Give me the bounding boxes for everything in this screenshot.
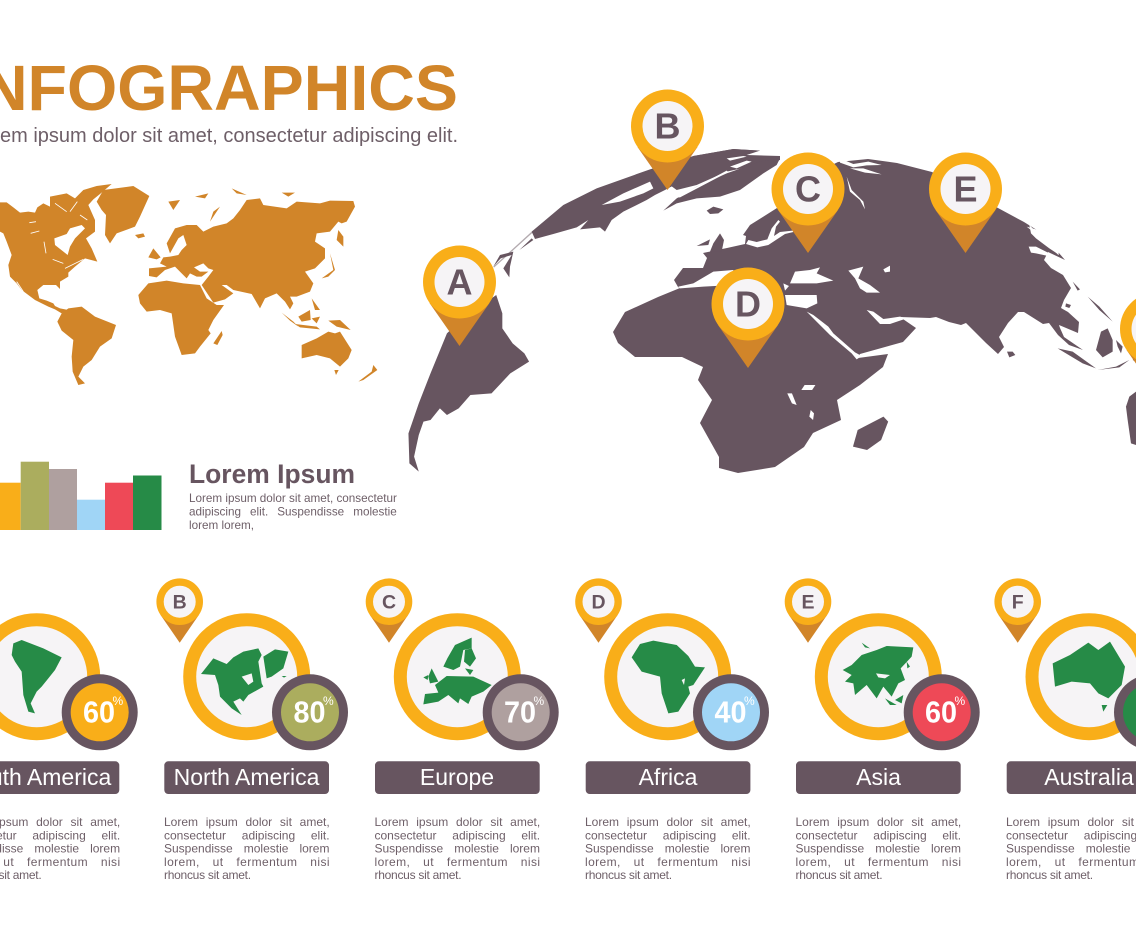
pin A: A xyxy=(446,262,472,302)
text xyxy=(1006,815,1136,882)
pin D: D xyxy=(735,284,761,324)
percent badge: % xyxy=(534,694,544,708)
percent badge: 70 xyxy=(504,694,536,730)
text: consectetur adipiscing elit. xyxy=(585,828,751,842)
text xyxy=(374,815,540,882)
iceland xyxy=(707,207,723,214)
panel: north america xyxy=(156,578,348,882)
text: Lorem ipsum dolor sit amet, xyxy=(796,815,961,829)
small pin xyxy=(994,578,1041,643)
label: Europe xyxy=(420,764,494,790)
text: lorem, ut fermentum nisi xyxy=(374,855,540,869)
percent badge xyxy=(904,674,980,750)
text: Suspendisse molestie lorem xyxy=(585,842,750,856)
african lakes xyxy=(801,385,815,390)
label: Africa xyxy=(639,764,698,790)
large dark world map xyxy=(408,149,1136,473)
arctic streaks xyxy=(850,168,882,174)
ring xyxy=(815,613,942,740)
text: Suspendisse molestie lorem xyxy=(796,842,961,856)
panel: europe xyxy=(366,578,559,882)
pin D xyxy=(712,268,784,368)
panel: australia xyxy=(994,578,1136,882)
south america xyxy=(408,295,529,472)
small pin: D xyxy=(591,592,606,614)
chart text: Lorem ipsum dolor sit amet, consectetur xyxy=(189,492,397,505)
eurasia and africa xyxy=(613,159,1083,473)
label: Australia xyxy=(1044,764,1134,790)
icon: africa map xyxy=(632,641,705,713)
chart text xyxy=(189,492,397,532)
text: consectetur adipiscing elit. xyxy=(164,828,330,842)
label: North America xyxy=(174,764,320,790)
small pin xyxy=(156,578,203,643)
ring xyxy=(604,613,731,740)
panel: asia xyxy=(785,578,980,882)
chart text: lorem lorem, xyxy=(189,519,254,532)
chart text: adipiscing elit. Suspendisse molestie xyxy=(189,506,397,518)
ring xyxy=(0,613,100,740)
small pin xyxy=(366,578,412,643)
madagascar xyxy=(853,417,888,450)
bar chart xyxy=(0,462,162,530)
label xyxy=(375,761,540,794)
label xyxy=(796,761,961,794)
text: Lorem ipsum dolor sit amet, xyxy=(164,815,330,829)
pin C xyxy=(772,152,844,253)
percent badge xyxy=(693,674,769,750)
text: lorem, ut fermentum nisi xyxy=(796,855,961,869)
pin E: E xyxy=(953,168,978,210)
ring xyxy=(183,613,310,740)
icon: south america map xyxy=(12,640,62,713)
pin B xyxy=(631,90,704,190)
text: rhoncus sit amet. xyxy=(585,868,672,882)
small pin: E xyxy=(801,592,815,614)
chart heading: Lorem Ipsum xyxy=(189,459,355,489)
percent badge xyxy=(62,674,138,750)
icon: asia map xyxy=(843,643,913,705)
text: Suspendisse molestie lorem xyxy=(374,842,540,856)
small pin xyxy=(575,578,622,643)
label xyxy=(586,761,750,794)
british isles xyxy=(710,233,724,252)
text xyxy=(585,815,751,882)
text: Lorem ipsum dolor sit amet, xyxy=(585,815,751,829)
text: lorem, ut fermentum nisi xyxy=(164,855,330,869)
greenland xyxy=(667,149,780,190)
small orange world map xyxy=(0,184,377,385)
small pin: B xyxy=(173,592,187,614)
label: Asia xyxy=(856,764,901,790)
text: Suspendisse molestie lorem xyxy=(164,842,329,856)
percent badge: % xyxy=(954,694,966,708)
percent badge: % xyxy=(112,694,124,708)
small pin xyxy=(785,578,831,643)
small pin: C xyxy=(382,592,396,614)
percent badge xyxy=(1114,674,1136,750)
seas xyxy=(678,270,733,288)
text: rhoncus sit amet. xyxy=(1006,868,1093,882)
pin A xyxy=(423,246,496,346)
pin F xyxy=(1120,292,1136,393)
pin C: C xyxy=(795,168,821,210)
text: consectetur adipiscing elit. xyxy=(796,828,961,842)
icon: europe map xyxy=(423,638,492,704)
text: lorem, ut fermentum nisi xyxy=(585,855,751,869)
text xyxy=(796,815,961,882)
text: rhoncus sit amet. xyxy=(164,868,251,882)
asia east islands xyxy=(1029,225,1059,255)
north america xyxy=(532,149,760,239)
label xyxy=(1007,761,1136,794)
text: rhoncus sit amet. xyxy=(374,868,461,882)
percent badge: 60 xyxy=(83,694,115,730)
panel: africa xyxy=(575,578,769,882)
pin B: B xyxy=(654,106,680,146)
text xyxy=(164,815,330,882)
ring xyxy=(394,613,521,740)
panel: south america xyxy=(0,613,138,882)
percent badge xyxy=(483,674,559,750)
percent badge: % xyxy=(323,694,334,708)
text: Lorem ipsum dolor sit amet, xyxy=(374,815,540,829)
percent badge xyxy=(272,674,348,750)
australia partial xyxy=(1126,392,1136,445)
percent badge: 80 xyxy=(294,694,326,730)
small pin: F xyxy=(1012,592,1024,614)
text: rhoncus sit amet. xyxy=(796,868,882,882)
icon: australia map xyxy=(1053,642,1125,712)
percent badge: 60 xyxy=(925,694,957,730)
icon: north america map xyxy=(201,648,288,715)
ring xyxy=(1026,613,1136,740)
text: consectetur adipiscing elit. xyxy=(374,828,540,842)
percent badge: % xyxy=(744,694,755,708)
text xyxy=(0,815,121,882)
pin E xyxy=(929,152,1002,253)
percent badge: 40 xyxy=(714,694,746,730)
